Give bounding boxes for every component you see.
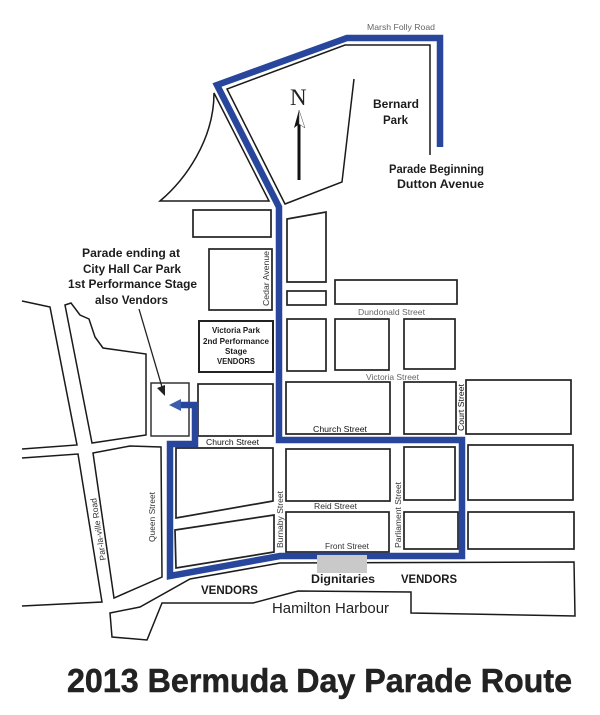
street labels: Reid Street	[314, 501, 358, 511]
street labels: Cedar Avenue	[261, 251, 271, 306]
label: parade ending	[68, 246, 197, 307]
label: Hamilton Harbour: Hamilton Harbour	[272, 600, 389, 617]
Victoria Park block: 2nd Performance	[203, 336, 269, 346]
dignitaries stand	[317, 555, 367, 573]
north arrow: N	[290, 85, 307, 110]
street labels: Queen Street	[147, 491, 157, 542]
street labels: Church Street	[313, 424, 368, 434]
city blocks	[175, 210, 574, 568]
street labels: Front Street	[325, 541, 370, 551]
label: parade ending: also Vendors	[95, 293, 168, 307]
label: parade ending: Parade ending at	[82, 246, 180, 260]
street labels: Victoria Street	[366, 372, 420, 382]
Victoria Park block: VENDORS	[217, 356, 255, 366]
street labels	[88, 251, 466, 561]
west side blocks	[22, 301, 162, 606]
route end arrowhead	[169, 399, 181, 411]
label: parade beginning: Parade Beginning	[389, 164, 484, 176]
label: parade ending: 1st Performance Stage	[68, 277, 197, 291]
street labels: Parliament Street	[393, 481, 403, 548]
label: Bernard Park	[373, 97, 419, 127]
road label: Marsh Folly Road: Marsh Folly Road	[367, 22, 435, 32]
label: Dignitaries: Dignitaries	[311, 574, 375, 586]
street labels: Church Street	[206, 437, 260, 447]
Bernard Park outline	[227, 45, 430, 204]
triangular park	[160, 93, 269, 201]
label: parade beginning	[389, 164, 484, 191]
title: 2013 Bermuda Day Parade Route	[67, 662, 572, 699]
street labels: Burnaby Street	[275, 490, 285, 548]
label: vendors east: VENDORS	[401, 574, 457, 586]
street labels: Court Street	[456, 383, 466, 431]
label: parade beginning: Dutton Avenue	[397, 179, 484, 191]
label: Bernard Park: Bernard	[373, 97, 419, 111]
label: Bernard Park: Park	[383, 113, 408, 127]
north arrow	[290, 85, 307, 180]
Victoria Park block: Stage	[225, 346, 247, 356]
harbour shoreline	[110, 562, 575, 640]
car park block	[151, 383, 189, 436]
street labels: Dundonald Street	[358, 307, 426, 317]
street labels: Par-la-ville Road	[88, 497, 108, 561]
Victoria Park block: Victoria Park	[212, 325, 260, 335]
Victoria Park block	[199, 321, 273, 372]
parade route line	[170, 38, 462, 576]
label: vendors west: VENDORS	[201, 585, 258, 597]
callout arrow to car park	[139, 309, 165, 396]
label: parade ending: City Hall Car Park	[83, 262, 181, 276]
